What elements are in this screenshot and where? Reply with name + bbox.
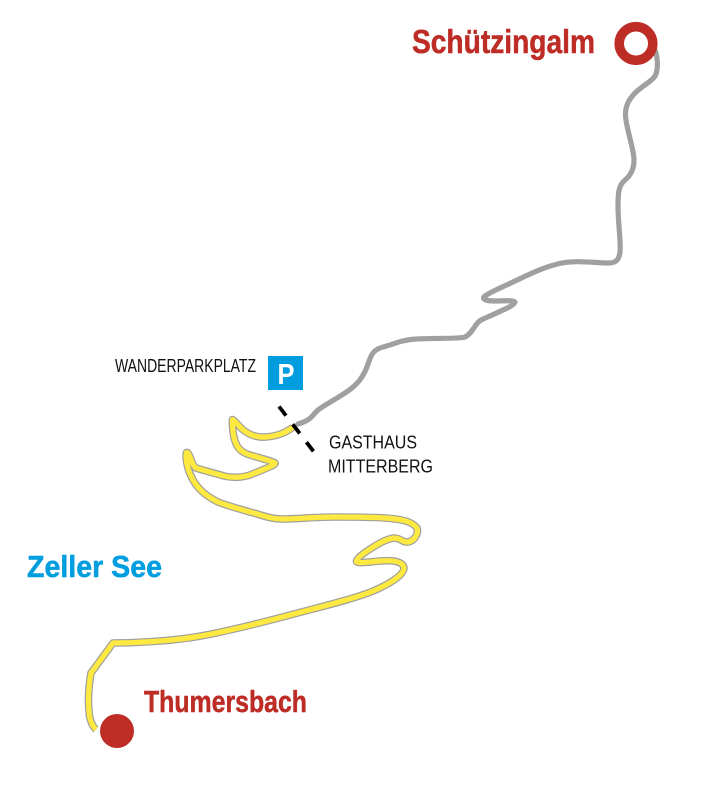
lower route: yellow road with grey casing	[89, 420, 417, 730]
dashed divider at Gasthaus Mitterberg	[279, 406, 314, 452]
icon: parking sign	[268, 356, 303, 391]
label: Schützingalm: Schützingalm	[412, 23, 595, 60]
label: Thumersbach: Thumersbach	[144, 685, 307, 719]
label: Zeller See: Zeller See	[27, 549, 162, 584]
label: Wanderparkplatz: WANDERPARKPLATZ	[115, 356, 256, 376]
marker: Thumersbach dot	[100, 714, 134, 748]
label: Gasthaus Mitterberg: GASTHAUS	[329, 432, 417, 452]
label: Gasthaus Mitterberg: MITTERBERG	[328, 456, 433, 476]
upper route: grey trail	[298, 50, 657, 424]
label: Gasthaus Mitterberg	[328, 432, 433, 476]
marker: Schützingalm ring	[619, 27, 653, 60]
icon: parking sign: P	[278, 359, 294, 391]
